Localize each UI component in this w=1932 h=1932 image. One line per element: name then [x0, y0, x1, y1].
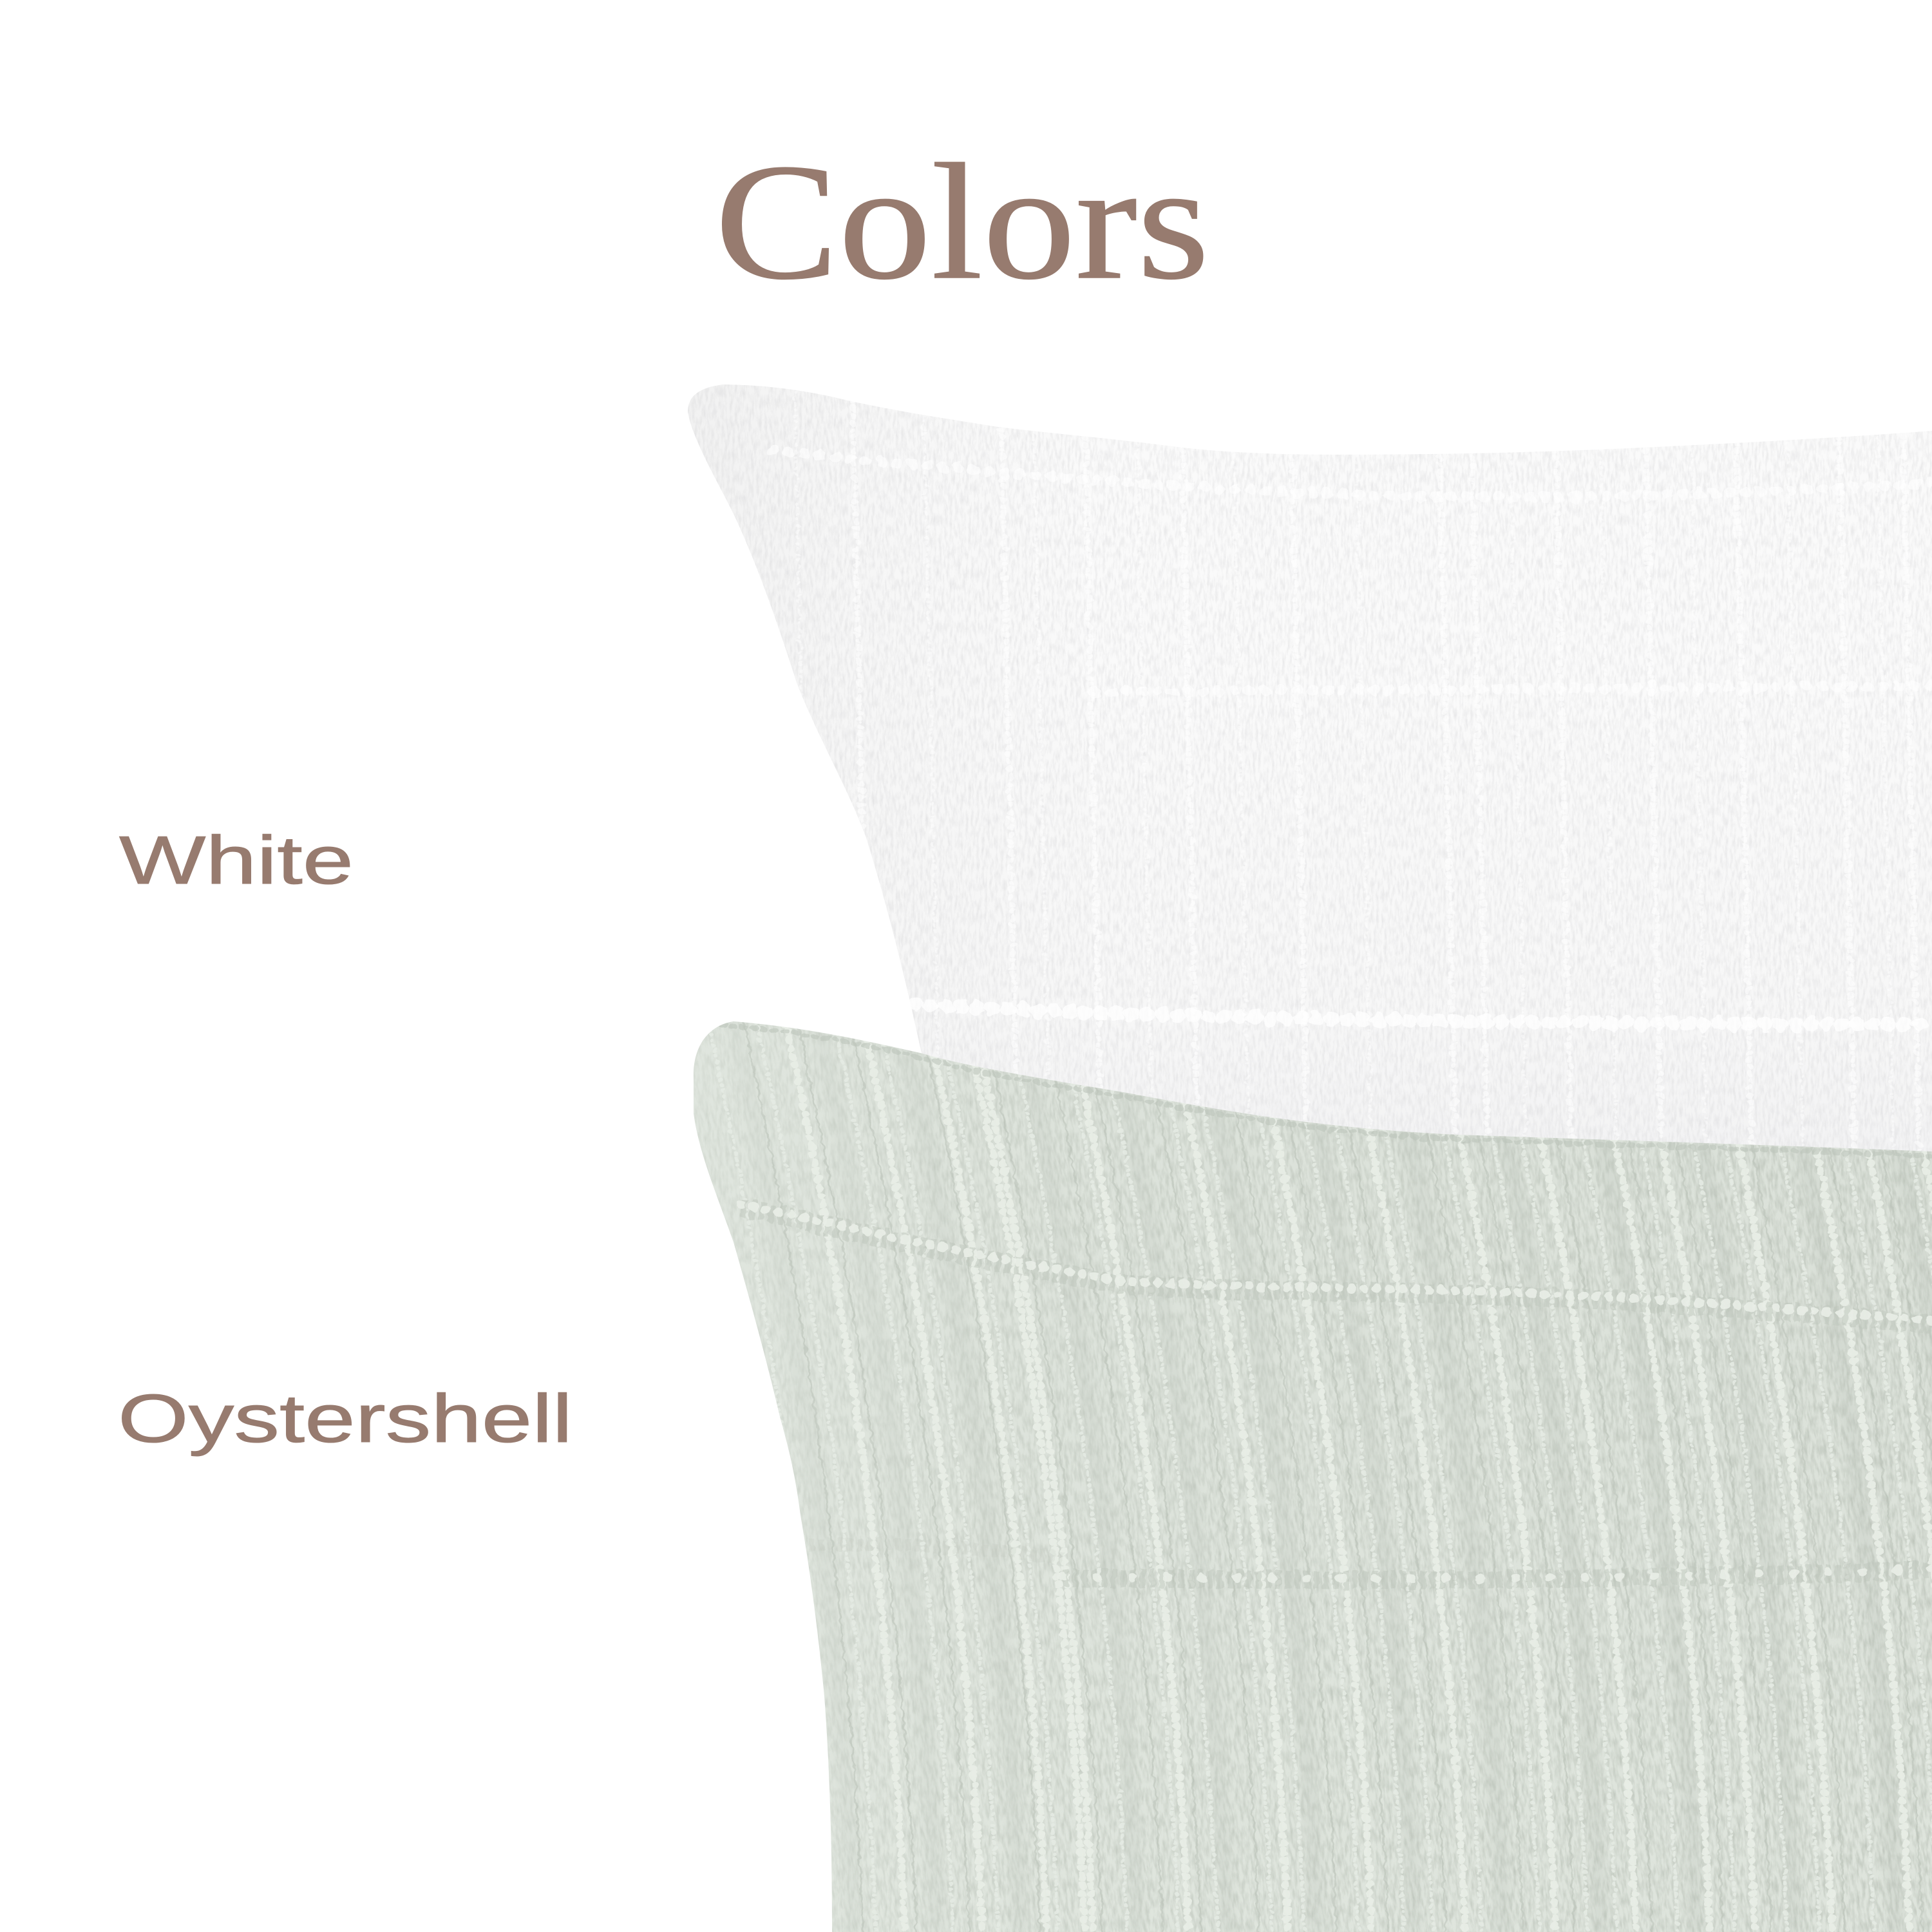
oyster seams bobbles [741, 1204, 1932, 1578]
pillow: oystershell [342, 966, 1932, 1932]
white fabric base [1007, 1014, 1932, 1151]
title: Colors: Colors [715, 129, 1209, 314]
oyster seams shadow [741, 1208, 1932, 1580]
oyster left lightening [670, 1005, 1932, 1932]
oyster fabric base [670, 1005, 1932, 1932]
oyster weave [342, 966, 1932, 1932]
white fabric weave [688, 385, 1932, 1150]
oyster slub stripes [696, 966, 1932, 1932]
pillow: white [688, 384, 1932, 1151]
white vertical slubs [766, 402, 1932, 1151]
label: Oystershell: Oystershell [118, 1381, 573, 1457]
top edge stitching [721, 1025, 1932, 1156]
fine dark warp lines [731, 966, 1932, 1932]
bold light yarns [773, 966, 1932, 1932]
thin light yarns [696, 966, 1932, 1932]
label: White: White [119, 822, 354, 898]
oyster tonal streaks [721, 966, 1932, 1932]
white horizontal seams [773, 451, 1932, 1024]
